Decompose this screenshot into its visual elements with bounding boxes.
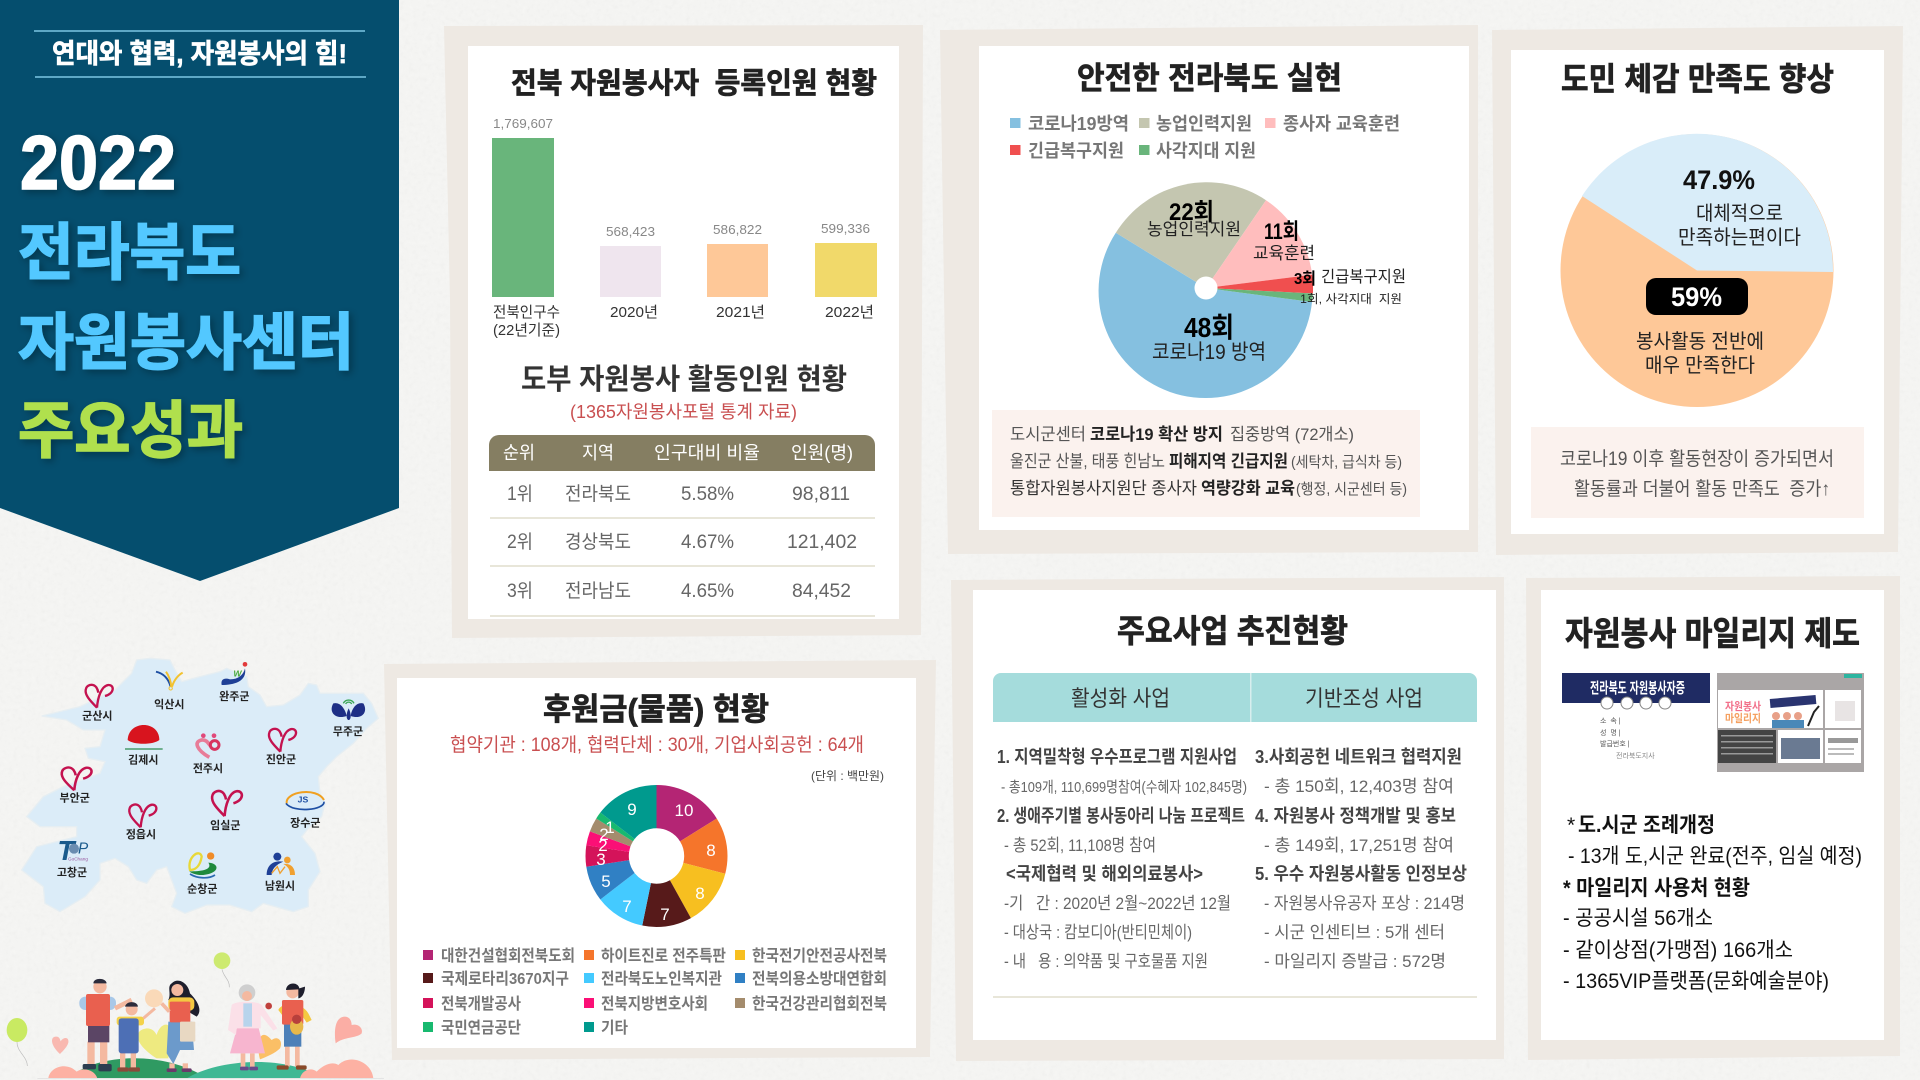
donut chart: donors: 8 [695, 884, 705, 903]
pie chart: satisfaction: 59% [1671, 282, 1722, 312]
pie chart: activities [1099, 182, 1406, 398]
pie legend: 사각지대 지원 [1156, 141, 1256, 161]
municipal names: 김제시 [128, 752, 158, 766]
logo: Jeonju [197, 733, 219, 757]
image: volunteer ID card: 소 속 | [1600, 717, 1621, 725]
bar chart: population and volunteers [492, 116, 877, 339]
table: activity ranking: 인원(명) [791, 443, 853, 463]
donut chart: donors: 5 [601, 872, 611, 891]
bar chart: population and volunteers: 2022년 [825, 304, 874, 321]
donut legend: 한국건강관리협회전북 [752, 995, 887, 1013]
logo: Sunchang [189, 852, 217, 878]
donut legend: 국민연금공단 [441, 1019, 521, 1037]
heading: donations: 후원금(물품) 현황 [543, 692, 769, 727]
image: mileage website screenshot: 자원봉사 [1725, 699, 1761, 713]
banner title: year: 2022 [20, 121, 176, 206]
logo: Wanju: W [233, 669, 242, 679]
logo: Buan [62, 767, 92, 790]
pie chart: satisfaction: 47.9% [1683, 165, 1755, 195]
text: ordinance and usage: * 마일리지 사용처 현황 [1563, 877, 1750, 900]
column: foundation projects [1255, 747, 1467, 971]
bar chart: population and volunteers: 599,336 [821, 221, 870, 236]
panel: main projects [951, 577, 1504, 1061]
table: activity ranking: 84,452 [792, 581, 851, 602]
table: activity ranking: 4.67% [681, 532, 734, 553]
column: foundation projects: 3.사회공헌 네트워크 협력지원 [1255, 747, 1462, 767]
person: girl with basket [265, 984, 312, 1070]
donut legend [423, 947, 887, 1037]
panel: registered volunteers [444, 25, 923, 638]
text: ordinance and usage: 도.시군 조례개정 [1578, 814, 1715, 837]
note box: satisfaction: 코로나19 이후 활동현장이 증가되면서 [1560, 448, 1834, 470]
pie legend [1010, 114, 1400, 161]
note box: safety activities: 울진군 산불, 태풍 힌남노 [1010, 452, 1165, 471]
logo: Gochang: T [57, 835, 77, 866]
column: activation projects: - 대상국 : 캄보디아(반티민체이) [1004, 923, 1192, 942]
column: activation projects: 2. 생애주기별 봉사동아리 나눔 프로젝트 [997, 806, 1245, 826]
bar chart: population and volunteers: 전북인구수 [493, 304, 560, 321]
note box: safety activities: (행정, 시군센터 등) [1296, 481, 1407, 498]
banner title: achievements: 주요성과 [18, 397, 243, 466]
column: activation projects: - 총 52회, 11,108명 참여 [1004, 836, 1156, 855]
text: ordinance and usage: * [1567, 814, 1575, 837]
note box: satisfaction [1531, 427, 1864, 518]
heading: activity by province: 도부 자원봉사 활동인원 현황 [521, 363, 847, 396]
municipal names: 부안군 [60, 792, 90, 805]
logo: Gochang: GoChang [68, 857, 88, 862]
donut chart: donors: 7 [660, 905, 670, 924]
panel: mileage system [1526, 576, 1900, 1060]
pie chart: activities: 코로나19 방역 [1152, 341, 1266, 364]
municipal names: 남원시 [265, 878, 295, 892]
donut chart: donors: 2 [598, 836, 608, 855]
note box: safety activities: 도시군센터 [1010, 425, 1086, 444]
logo: Jangsu [286, 792, 324, 809]
table: activity ranking: 전라남도 [565, 580, 631, 602]
pie chart: activities: 48회 [1184, 312, 1234, 343]
donut chart: donors: 3 [596, 850, 606, 869]
municipal names: 군산시 [82, 708, 112, 722]
pie chart: activities: 3회 [1294, 270, 1316, 288]
table: activity ranking: 98,811 [792, 484, 850, 505]
note box: safety activities: (세탁차, 급식차 등) [1291, 454, 1402, 471]
municipal names: 임실군 [210, 819, 240, 832]
hills and clouds [37, 1058, 384, 1079]
logo: Gunsan [86, 685, 113, 708]
donut chart: donors: 7 [622, 897, 632, 916]
table: activity ranking: 5.58% [681, 484, 734, 505]
image: volunteer ID card: 전라북도 자원봉사자증 [1590, 680, 1685, 697]
unit note: (단위 : 백만원) [811, 769, 884, 783]
logo: Imsil [212, 791, 242, 816]
municipal names: 정읍시 [126, 828, 156, 841]
pie legend: 농업인력지원 [1156, 114, 1252, 134]
donut chart: donors [596, 800, 716, 924]
municipal names: 진안군 [266, 753, 296, 766]
municipal names: 순창군 [187, 881, 217, 895]
logo: Namwon [267, 853, 295, 875]
pie chart: activities: 11회 [1264, 219, 1299, 244]
bar chart: population and volunteers: 1,769,607 [493, 116, 553, 131]
illustration: volunteers on a hill [7, 952, 384, 1079]
donut legend: 대한건설협회전북도회 [441, 947, 575, 965]
column: activation projects: -기 간 : 2020년 2월~2022년 12월 [1004, 894, 1231, 913]
source note: (1365자원봉사포털 통계 자료) [570, 402, 797, 422]
municipal names: 전주시 [193, 762, 223, 775]
logo: Gochang [57, 835, 89, 866]
table: activity ranking: 경상북도 [565, 531, 631, 553]
text: ordinance and usage: - 13개 도,시군 완료(전주, 임실 예정) [1568, 845, 1862, 868]
column: activation projects: - 총109개, 110,699명참여(수혜자 102,845명) [1001, 779, 1247, 796]
donut legend: 전북의용소방대연합회 [752, 970, 887, 988]
pie chart: activities: 긴급복구지원 [1321, 268, 1406, 286]
municipal names: 고창군 [57, 865, 87, 879]
column: foundation projects: 4. 자원봉사 정책개발 및 홍보 [1255, 806, 1456, 826]
column: activation projects [997, 747, 1247, 971]
table: activity ranking: 전라북도 [565, 483, 631, 505]
image: volunteer ID card: 발급번호 | [1600, 739, 1630, 748]
banner title: center: 자원봉사센터 [18, 309, 354, 378]
donut legend: 기타 [601, 1019, 628, 1037]
donut legend: 전북개발공사 [441, 995, 521, 1013]
donut chart: donors: 10 [675, 801, 693, 820]
heading: main projects: 주요사업 추진현황 [1117, 613, 1348, 649]
municipal names: 완주군 [219, 690, 249, 703]
pie chart: satisfaction: 봉사활동 전반에 [1636, 330, 1764, 353]
bar chart: population and volunteers: 568,423 [606, 224, 655, 239]
column: activation projects: 1. 지역밀착형 우수프로그램 지원사업 [997, 747, 1237, 767]
image: volunteer ID card [1562, 673, 1710, 760]
logo: Gimje [125, 725, 163, 749]
pie chart: activities: 22회 [1169, 199, 1214, 226]
table: activity ranking: 지역 [582, 443, 614, 463]
table: activity ranking: 3위 [507, 580, 533, 602]
logo: Jeongeup [129, 804, 156, 827]
person: grandmother in pink [228, 984, 277, 1070]
panel: satisfaction [1492, 26, 1903, 555]
partner counts: 협약기관 : 108개, 협력단체 : 30개, 기업사회공헌 : 64개 [450, 734, 864, 756]
bar chart: population and volunteers: 2021년 [716, 304, 765, 321]
table header: 기반조성 사업 [1305, 686, 1423, 711]
donut chart: donors: 8 [706, 841, 716, 860]
note box: satisfaction: 활동률과 더불어 활동 만족도 증가↑ [1574, 478, 1830, 500]
column: activation projects: <국제협력 및 해외의료봉사> [1006, 864, 1203, 884]
municipal names: 무주군 [333, 725, 363, 738]
donut legend: 전북지방변호사회 [601, 995, 708, 1013]
pie chart: activities: 교육훈련 [1253, 244, 1315, 263]
municipal names: 장수군 [290, 817, 320, 830]
text: ordinance and usage: - 같이상점(가맹점) 166개소 [1563, 939, 1793, 962]
table: activity ranking: 4.65% [681, 581, 734, 602]
person: child in overalls [117, 989, 163, 1072]
balloons and hearts [7, 952, 362, 1066]
pie chart: satisfaction [1560, 134, 1834, 407]
donut chart: donors: 2 [599, 825, 609, 844]
pie legend: 종사자 교육훈련 [1283, 114, 1400, 134]
column: activation projects: - 내 용 : 의약품 및 구호물품 지원 [1004, 952, 1208, 971]
table: activity ranking: 121,402 [787, 532, 857, 553]
column: foundation projects: 5. 우수 자원봉사활동 인정보상 [1255, 864, 1467, 884]
pie legend: 긴급복구지원 [1028, 141, 1124, 161]
donut legend: 전라북도노인복지관 [601, 970, 722, 988]
logo: Jangsu: JS [298, 795, 308, 805]
municipal names [57, 690, 363, 895]
pie chart: activities: 1회, 사각지대 지원 [1300, 292, 1402, 306]
donut legend: 국제로타리3670지구 [441, 970, 569, 988]
pie chart: activities: 농업인력지원 [1147, 220, 1241, 239]
note box: safety activities: 피해지역 긴급지원 [1169, 452, 1288, 471]
donut chart: donors: 1 [605, 818, 615, 837]
column: foundation projects: - 시군 인센티브 : 5개 센터 [1264, 923, 1445, 942]
note box: safety activities: 코로나19 확산 방지 [1090, 425, 1223, 444]
table: activity ranking: 순위 [503, 443, 535, 463]
panel: donations [384, 660, 936, 1060]
bar chart: population and volunteers: 586,822 [713, 222, 762, 237]
map of Jeollabuk-do with municipal logos [22, 658, 378, 913]
table header [993, 673, 1477, 722]
banner title: province: 전라북도 [18, 219, 241, 288]
note box: safety activities: 집중방역 (72개소) [1230, 425, 1354, 444]
pie chart: satisfaction: 매우 만족한다 [1645, 354, 1755, 377]
logo: Wanju [221, 662, 247, 685]
pie chart: satisfaction: 대체적으로 [1696, 202, 1783, 225]
note box: safety activities: 통합자원봉사지원단 종사자 [1010, 479, 1197, 498]
image: volunteer ID card: 전라북도지사 [1616, 751, 1655, 760]
image: mileage website screenshot [1717, 673, 1864, 772]
logo: Gochang: P [78, 840, 89, 857]
logo: Iksan [156, 672, 183, 690]
logo: Muju [332, 700, 365, 720]
municipal names: 익산시 [154, 697, 184, 711]
donut legend: 하이트진로 전주특판 [601, 947, 726, 965]
table: activity ranking: 인구대비 비율 [654, 443, 760, 463]
text: ordinance and usage [1563, 814, 1862, 993]
column: foundation projects: - 자원봉사유공자 포상 : 214명 [1264, 894, 1465, 913]
donut legend: 한국전기안전공사전북 [752, 947, 887, 965]
table header: 활성화 사업 [1071, 686, 1170, 711]
text: ordinance and usage: - 공공시설 56개소 [1563, 907, 1713, 930]
text: ordinance and usage: - 1365VIP플랫폼(문화예술분야) [1563, 970, 1829, 993]
heading: safe Jeollabuk-do: 안전한 전라북도 실현 [1077, 61, 1342, 96]
note box: safety activities: 역량강화 교육 [1201, 479, 1295, 498]
column: foundation projects: - 총 149회, 17,251명 참여 [1264, 836, 1454, 855]
heading: registered volunteers: 전북 자원봉사자 등록인원 현황 [511, 67, 877, 100]
bar chart: population and volunteers: (22년기준) [493, 322, 560, 339]
column: foundation projects: - 총 150회, 12,403명 참여 [1264, 777, 1454, 796]
bar chart: population and volunteers: 2020년 [610, 304, 658, 321]
person: woman with bag [162, 981, 199, 1072]
banner subtitle: 연대와 협력, 자원봉사의 힘! [52, 39, 347, 69]
image: volunteer ID card: 성 명 | [1600, 728, 1621, 737]
table: activity ranking [489, 435, 875, 617]
logo: Jinan [269, 729, 296, 752]
panel: safe Jeollabuk-do [940, 25, 1478, 554]
note box: safety activities [992, 410, 1420, 517]
map shape [22, 658, 378, 913]
pie legend: 코로나19방역 [1028, 114, 1129, 134]
table: activity ranking: 1위 [507, 483, 533, 505]
header banner [0, 0, 399, 581]
heading: mileage system: 자원봉사 마일리지 제도 [1565, 615, 1860, 652]
heading: satisfaction: 도민 체감 만족도 향상 [1561, 61, 1834, 97]
column: foundation projects: - 마일리지 증발급 : 572명 [1264, 952, 1446, 971]
table: activity ranking: 2위 [507, 531, 533, 553]
image: mileage website screenshot: 마일리지 [1725, 711, 1761, 725]
pie chart: satisfaction: 만족하는편이다 [1678, 226, 1801, 249]
donut chart: donors: 9 [627, 800, 637, 819]
person: man in red vest [79, 979, 132, 1071]
